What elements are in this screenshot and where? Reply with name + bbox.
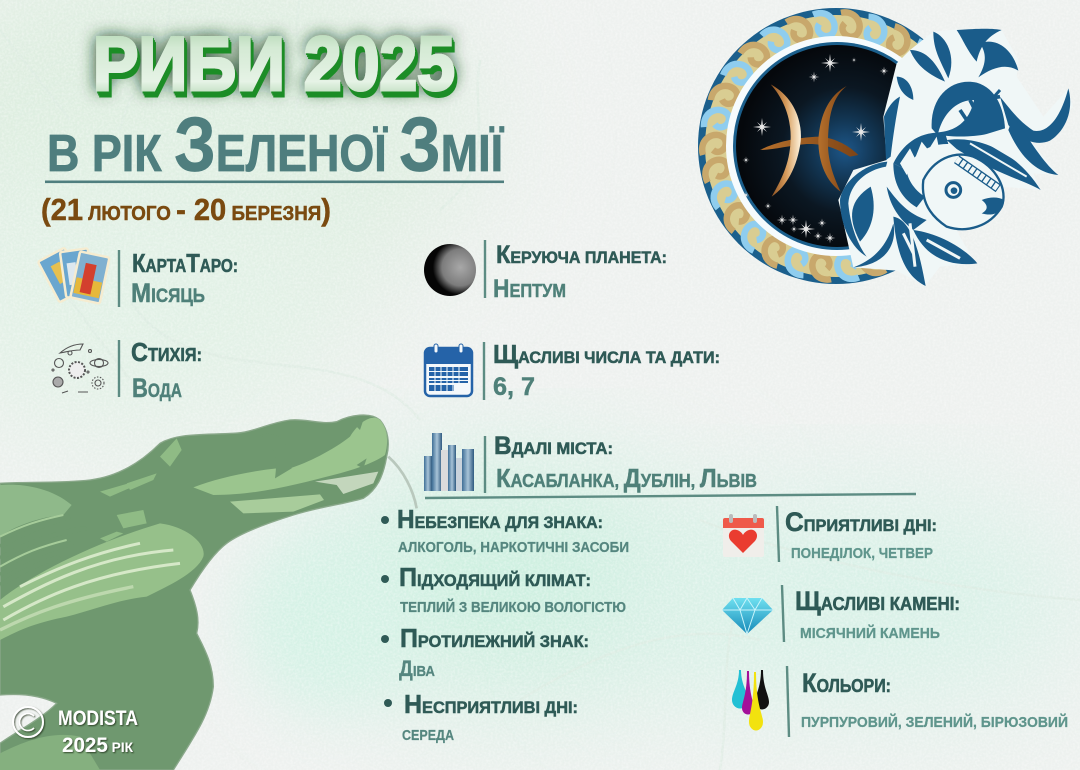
copyright: 2025 РІК bbox=[62, 734, 133, 757]
colours block bbox=[732, 666, 1068, 737]
danger item: НЕБЕЗПЕКА ДЛЯ ЗНАКА: bbox=[397, 504, 603, 534]
unfavourable days item: НЕСПРИЯТЛИВІ ДНІ: bbox=[404, 689, 578, 719]
climate item: ПІДХОДЯЩИЙ КЛІМАТ: bbox=[399, 562, 591, 592]
opposite sign item: ПРОТИЛЕЖНИЙ ЗНАК: bbox=[400, 623, 589, 653]
opposite sign item: ДІВА bbox=[399, 656, 435, 681]
tarot card block bbox=[38, 248, 238, 308]
unfavourable days item bbox=[384, 689, 578, 744]
colours block: ПУРПУРОВИЙ, ЗЕЛЕНИЙ, БІРЮЗОВИЙ bbox=[801, 713, 1068, 731]
lucky numbers block bbox=[425, 339, 720, 401]
zodiac emblem bbox=[698, 8, 1073, 286]
value: planet: НЕПТУМ bbox=[493, 275, 566, 303]
favourable days block bbox=[723, 506, 937, 562]
pisces symbol bbox=[760, 84, 858, 197]
lucky stones block bbox=[722, 585, 960, 642]
icon: calendar bbox=[425, 344, 472, 396]
danger item: АЛКОГОЛЬ, НАРКОТИЧНІ ЗАСОБИ bbox=[398, 540, 629, 556]
illustration: green snake bbox=[0, 415, 417, 770]
value: lucky numbers: 6, 7 bbox=[493, 373, 535, 401]
opposite sign item bbox=[381, 623, 589, 681]
lucky stones block: МІСЯЧНИЙ КАМЕНЬ bbox=[800, 624, 940, 642]
heading: tarot: КАРТАТАРО: bbox=[132, 248, 238, 278]
unfavourable days item: СЕРЕДА bbox=[402, 728, 454, 744]
ruling planet block bbox=[424, 240, 667, 303]
fish bbox=[838, 29, 1073, 286]
climate item: ТЕПЛИЙ З ВЕЛИКОЮ ВОЛОГІСТЮ bbox=[400, 598, 626, 616]
heading: favourable days: СПРИЯТЛИВІ ДНІ: bbox=[785, 507, 937, 537]
icon: heart calendar bbox=[723, 514, 764, 557]
ornamental ring bbox=[698, 8, 974, 284]
heading: colours: КОЛЬОРИ: bbox=[802, 668, 891, 698]
icon: space doodle bbox=[52, 344, 108, 393]
icon: tarot cards bbox=[38, 248, 109, 304]
favourable days block: ПОНЕДІЛОК, ЧЕТВЕР bbox=[791, 546, 933, 562]
heading: planet: КЕРУЮЧА ПЛАНЕТА: bbox=[496, 241, 667, 269]
heading: cities: ВДАЛІ МІСТА: bbox=[494, 432, 613, 460]
heading: element: СТИХІЯ: bbox=[131, 337, 202, 367]
climate item bbox=[381, 562, 626, 616]
icon: ink drops bbox=[732, 670, 769, 730]
copyright: MODISTA bbox=[58, 707, 138, 730]
element block bbox=[52, 337, 202, 403]
value: element: ВОДА bbox=[132, 373, 182, 403]
date range: (21 ЛЮТОГО - 20 БЕРЕЗНЯ) bbox=[41, 192, 331, 227]
subtitle: В РІК ЗЕЛЕНОЇ ЗМІЇ bbox=[47, 102, 504, 188]
value: cities: КАСАБЛАНКА, ДУБЛІН, ЛЬВІВ bbox=[496, 463, 757, 493]
icon: skyscrapers bbox=[424, 433, 474, 491]
icon: copyright bbox=[13, 707, 43, 737]
title: РИБИ 2025 bbox=[93, 22, 455, 107]
icon: diamond bbox=[722, 598, 773, 634]
value: tarot: МІСЯЦЬ bbox=[131, 278, 205, 308]
danger item bbox=[381, 504, 629, 556]
heading: lucky numbers: ЩАСЛИВІ ЧИСЛА ТА ДАТИ: bbox=[493, 339, 720, 369]
distant cities block bbox=[424, 432, 757, 493]
heading: lucky stones: ЩАСЛИВІ КАМЕНІ: bbox=[795, 586, 960, 616]
stars bbox=[742, 54, 888, 243]
copyright bbox=[13, 707, 138, 757]
icon: planet bbox=[424, 244, 476, 296]
